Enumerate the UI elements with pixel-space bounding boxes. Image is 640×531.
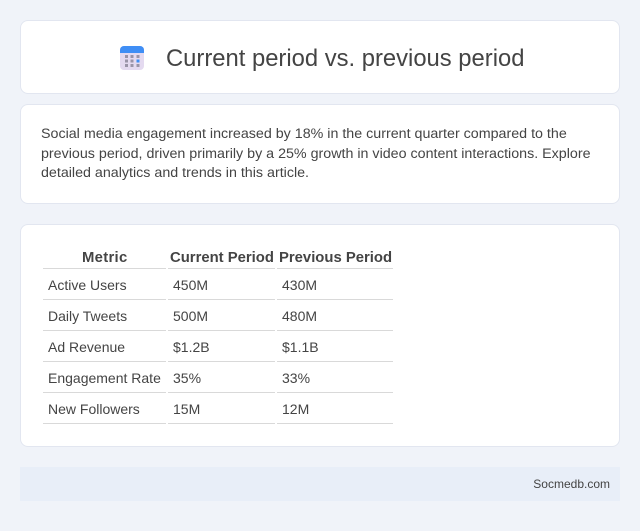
row: engagement rate bbox=[48, 370, 310, 386]
summary text: detailed analytics and trends in this article. bbox=[41, 165, 309, 181]
row: active users: 430M bbox=[282, 277, 317, 293]
table header: Metric bbox=[82, 250, 128, 266]
panel: title card bbox=[20, 20, 620, 94]
row: ad revenue: $1.2B bbox=[173, 339, 210, 355]
footer credit: Socmedb.com bbox=[533, 477, 610, 491]
row: daily tweets: Daily Tweets bbox=[48, 308, 127, 324]
footer bar bbox=[20, 467, 620, 501]
row: ad revenue: Ad Revenue bbox=[48, 339, 125, 355]
row: ad revenue: $1.1B bbox=[282, 339, 319, 355]
panel: table card bbox=[20, 224, 620, 447]
row: new followers: 12M bbox=[282, 401, 309, 417]
row: active users: 450M bbox=[173, 277, 208, 293]
comparison table bbox=[43, 250, 393, 424]
panel: summary card bbox=[20, 104, 620, 204]
row: active users: Active Users bbox=[48, 277, 127, 293]
summary text: Social media engagement increased by 18% in the current quarter compared to the bbox=[41, 126, 567, 142]
summary text: previous period, driven primarily by a 25% growth in video content interactions. Explore bbox=[41, 146, 591, 162]
row: daily tweets: 500M bbox=[173, 308, 208, 324]
title: Current period vs. previous period bbox=[166, 45, 524, 72]
row: new followers: 15M bbox=[173, 401, 200, 417]
table header: Current Period bbox=[170, 250, 274, 266]
row: new followers: New Followers bbox=[48, 401, 140, 417]
table header: Previous Period bbox=[279, 250, 392, 266]
row: ad revenue bbox=[48, 339, 319, 355]
row: engagement rate: Engagement Rate bbox=[48, 370, 161, 386]
row: active users bbox=[48, 277, 317, 293]
row: daily tweets: 480M bbox=[282, 308, 317, 324]
row: engagement rate: 35% bbox=[173, 370, 201, 386]
row: engagement rate: 33% bbox=[282, 370, 310, 386]
icon: calendar bbox=[120, 46, 144, 70]
row: daily tweets bbox=[48, 308, 317, 324]
table header bbox=[82, 250, 392, 266]
summary text bbox=[41, 126, 591, 181]
row: new followers bbox=[48, 401, 309, 417]
